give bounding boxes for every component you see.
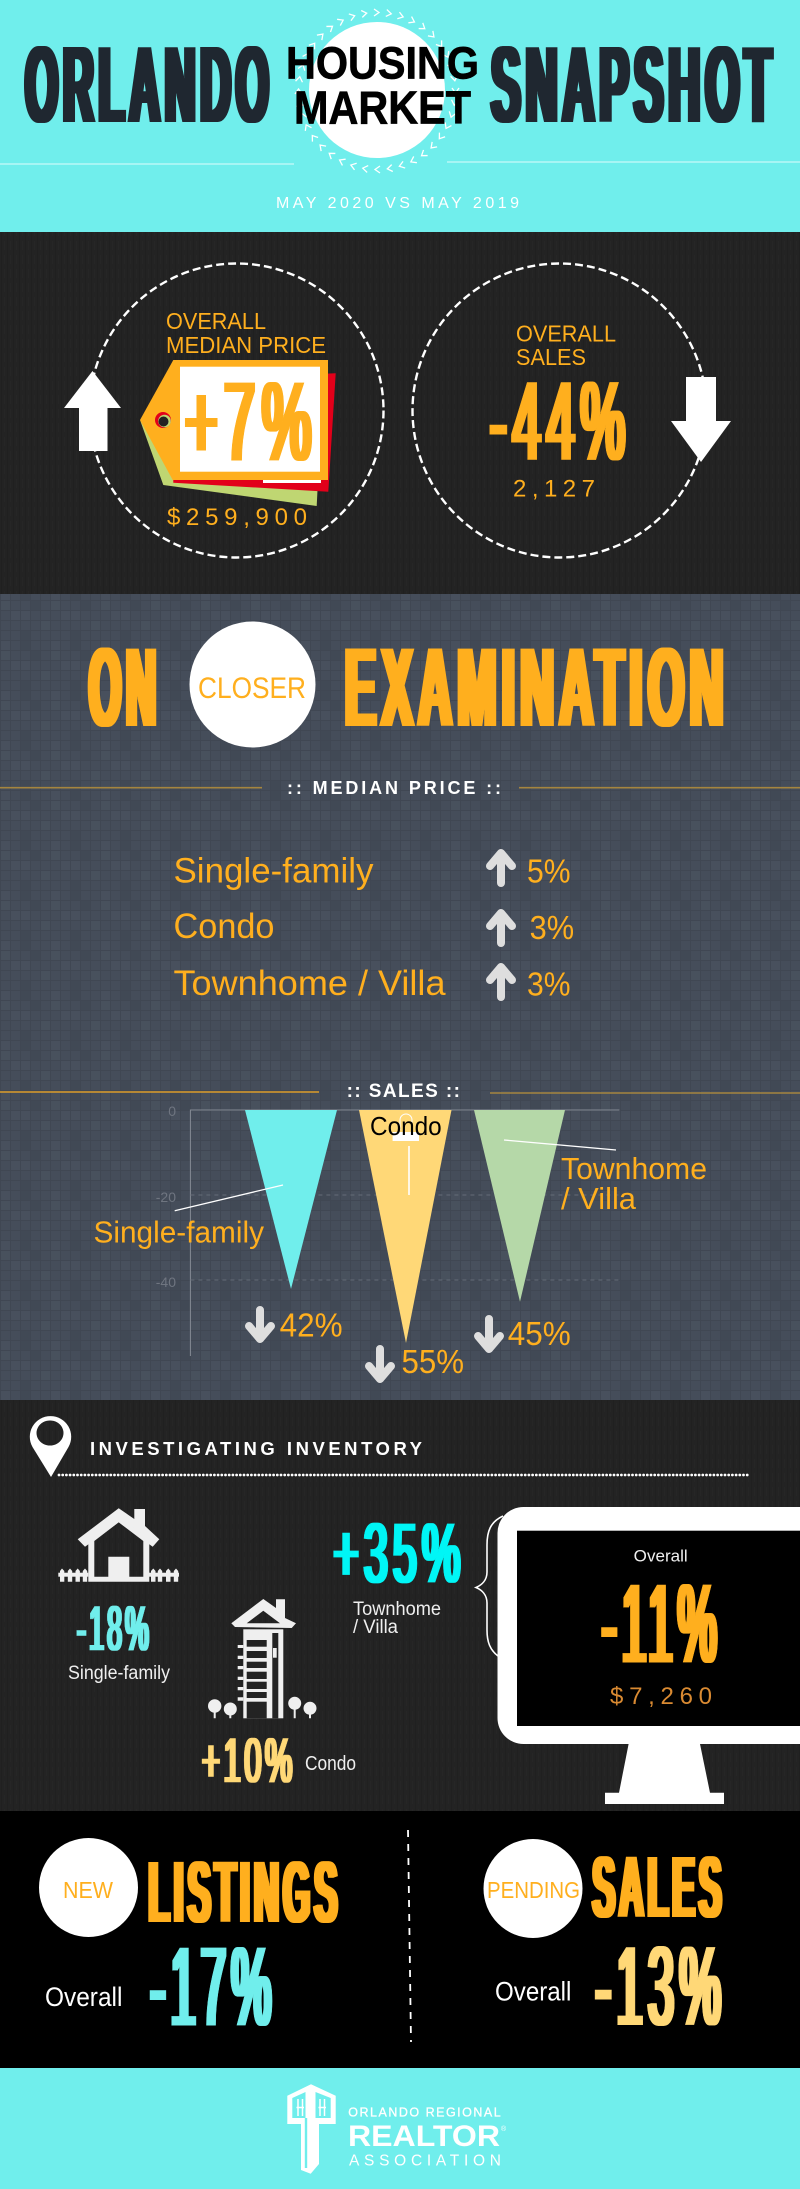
panel: investigating inventory [0,1400,800,1811]
panel: listings and pending sales: LISTINGS [148,1844,342,1941]
panel: header [0,0,800,232]
label: overall pending: Overall [495,1977,571,2007]
icon: down arrow [671,377,731,462]
median price list [174,852,574,1003]
label: townhome: Townhome [353,1599,441,1620]
row label: single-family: Single-family [174,852,374,891]
panel: overall stats [0,232,800,594]
value 3% townhome: 3% [527,966,570,1003]
icon: monitor [498,1507,800,1804]
new badge circle [39,1838,138,1937]
sales count: 2,127 [513,476,595,502]
icon: key house logo [287,2084,336,2174]
logo registered mark: ® [501,2125,507,2133]
overall sales label: OVERALL [516,320,616,346]
icon: up arrow [64,371,121,451]
triangle: condo [359,1110,452,1343]
label: pending: PENDING [487,1877,580,1903]
overall median price label: OVERALL [166,308,266,334]
axis label 0: 0 [168,1103,176,1119]
heading circle [190,622,316,748]
sales label line two: SALES [516,344,586,370]
label: villa: / Villa [561,1181,637,1216]
panel: listings and pending sales: -17% [150,1925,276,2049]
logo line: Realtor: REALTOR [348,2120,500,2153]
panel: closer examination: ON [89,625,161,750]
value 45%: 45% [508,1315,571,1352]
leader line: townhome [504,1140,616,1150]
label: condo: Condo [370,1111,442,1141]
median price label line two: MEDIAN PRICE [166,332,326,358]
logo line: Association: ASSOCIATION [349,2153,501,2170]
leader line: single-family [175,1185,283,1211]
icon: up arrow condo [490,913,512,943]
icon: house [58,1508,179,1582]
value 5%: 5% [527,853,570,890]
row label: condo: Condo [174,907,274,946]
label: villa: / Villa [353,1617,398,1638]
subtitle date comparison: MAY 2020 VS MAY 2019 [276,195,519,212]
title: Market: MARKET [294,82,471,134]
chevron ring around circle [295,9,459,173]
value 55%: 55% [402,1343,464,1380]
label: overall listings: Overall [45,1982,122,2012]
value 42%: 42% [280,1307,343,1344]
curly brace [476,1516,503,1656]
dashed circle left [90,264,384,558]
panel: closer examination [0,594,800,1400]
label: condo: Condo [305,1753,356,1775]
median price value: $259,900 [167,504,307,531]
label: single-family: Single-family [94,1215,264,1250]
axis label -20: -20 [156,1189,176,1205]
pending badge circle [484,1839,582,1938]
label: townhome: Townhome [561,1151,707,1186]
title: Housing: HOUSING [286,38,479,88]
logo line: Orlando Regional: ORLANDO REGIONAL [348,2106,501,2120]
icon: down arrow 42 [249,1310,271,1339]
icon: up arrow single-family [490,853,512,883]
triangle: single-family [245,1110,337,1289]
monitor value: $7,260 [610,1683,712,1710]
icon: price tag stack [140,360,336,506]
icon: up arrow townhome [490,967,512,997]
panel: listings and pending sales [0,1811,800,2069]
panel: header: ORLANDO [25,24,274,146]
panel: overall stats: -44% [490,360,631,484]
icon: down arrow 55 [369,1349,391,1379]
section heading: median price: :: MEDIAN PRICE :: [287,778,501,798]
row label: townhome: Townhome / Villa [174,964,446,1003]
icon: down arrow 45 [478,1319,500,1349]
panel: investigating inventory: +10% [202,1726,296,1796]
stat: townhome +35%: +35% [334,1506,466,1600]
icon: map pin [30,1416,71,1477]
axis label -40: -40 [156,1274,176,1290]
heading: Closer: CLOSER [198,672,306,705]
header white circle [309,22,445,158]
icon: condo tower [208,1599,316,1718]
panel: investigating inventory: -18% [77,1594,152,1664]
label: new: NEW [63,1877,113,1903]
tag percent +7%: +7% [185,360,318,484]
monitor label overall: Overall [634,1547,688,1566]
chart: sales triangles [94,1103,707,1380]
label: single-family: Single-family [68,1663,170,1684]
dashed circle right [412,264,706,558]
panel: footer [0,2068,800,2189]
condo callout marker [393,1114,419,1195]
section heading: inventory: INVESTIGATING INVENTORY [90,1438,423,1459]
section heading: sales: :: SALES :: [347,1081,460,1102]
triangle: townhome [474,1110,565,1302]
value 3% condo: 3% [530,909,574,946]
